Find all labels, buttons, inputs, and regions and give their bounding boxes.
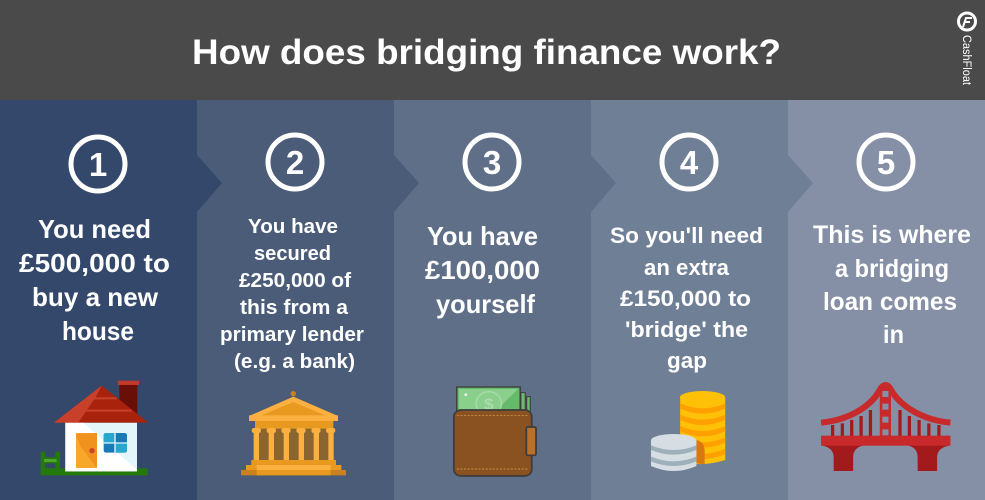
step 2 number [268,135,322,189]
step 4 text: an extra [644,255,730,280]
icon: wallet: $ [484,395,494,413]
step 2 text: (e.g. a bank) [234,351,355,373]
arrow: step 3 to 4 [591,155,616,212]
step 4 text [610,223,763,373]
step 3 text: yourself [436,289,535,319]
arrow: step 2 to 3 [394,155,419,212]
step 1 text: £500,000 to [19,248,170,278]
step 2 number: 2 [286,144,304,181]
panel: step 1 [0,100,222,500]
step 5 text: in [883,321,904,349]
step 4 number [662,135,716,189]
arrow: step 4 to 5 [788,155,813,212]
step 1 number: 1 [89,146,107,183]
logo: CashFloat: CashFloat [960,35,972,86]
step 2 text: You have [248,216,338,238]
step 2 text: secured [254,243,331,265]
step 5 text: This is where [813,221,971,249]
title: How does bridging finance work? [192,33,781,72]
step 3 number [465,135,519,189]
step 4 text: £150,000 to [620,286,751,311]
panel: step 2 [197,100,419,500]
icon: wallet [454,387,536,476]
step 5 text [813,221,971,349]
step 4 number: 4 [680,144,699,181]
step 5 text: loan comes [823,288,957,316]
step 5 number [859,135,913,189]
step 2 text: this from a [240,297,349,319]
panel: step 3 [394,100,616,500]
logo: CashFloat [958,13,976,86]
icon: bank [241,391,346,475]
step 2 text: primary lender [220,324,364,346]
icon: bridge [821,385,950,471]
step 1 text: You need [38,214,151,244]
step 1 text [19,214,170,346]
step 3 text: £100,000 [425,255,540,285]
step 4 text: 'bridge' the [625,317,748,342]
panel: step 4 [591,100,813,500]
step 5 number: 5 [877,144,895,181]
step 2 text: £250,000 of [239,270,351,292]
step 3 number: 3 [483,144,501,181]
step 1 text: buy a new [32,282,159,312]
step 2 text [220,216,364,373]
step 5 text: a bridging [835,255,949,283]
step 1 number [71,137,125,191]
step 4 text: So you'll need [610,223,763,248]
step 3 text: You have [427,221,538,251]
icon: coins [651,391,725,471]
step 3 text [425,221,540,319]
step 4 text: gap [667,348,707,373]
icon: house [41,381,148,475]
arrow: step 1 to 2 [197,155,222,212]
header bar [0,0,985,100]
step 1 text: house [62,316,134,346]
panel: step 5 [788,100,985,500]
